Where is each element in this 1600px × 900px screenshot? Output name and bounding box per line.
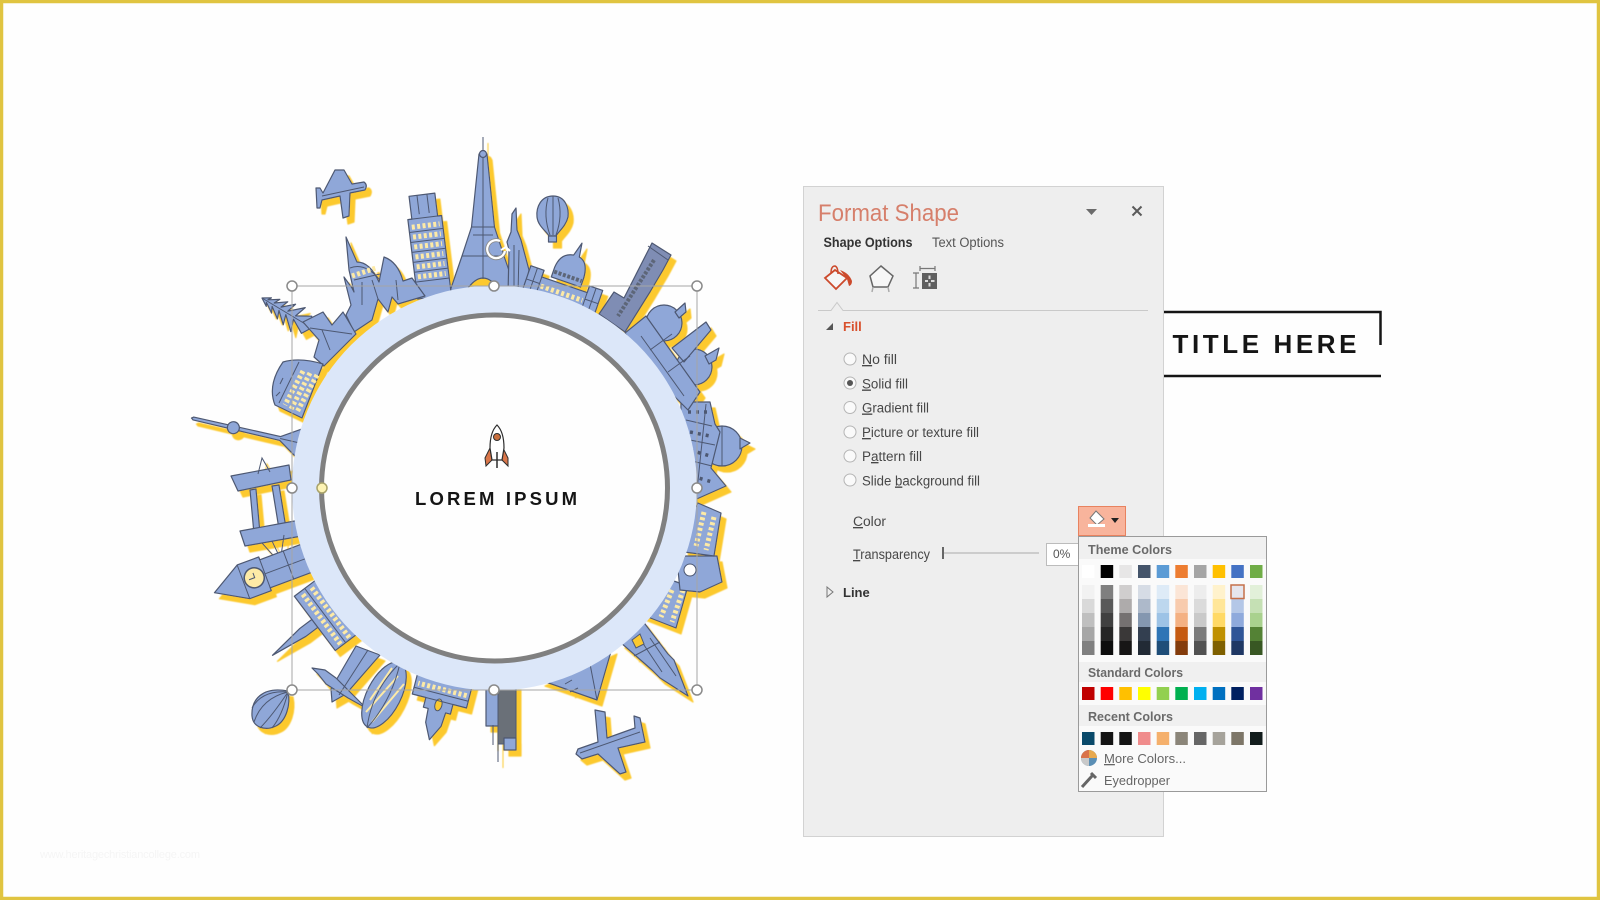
input: 0% [1046, 544, 1082, 566]
icon: fill bucket [825, 266, 852, 289]
heading: Recent Colors: Recent Colors [1088, 709, 1173, 724]
landmark: Christ statue [312, 646, 380, 708]
radio option: Pattern fill: Pattern fill [862, 449, 922, 464]
landmark: gothic spire [620, 620, 688, 696]
landmark: skyscraper [486, 684, 516, 762]
watermark: www.heritagechristiancollege.com [39, 849, 200, 861]
menu item: More Colors: More Colors... [1104, 751, 1186, 766]
landmark: twin domes [625, 303, 719, 410]
landmark: Parliament building [252, 575, 363, 682]
heading: Standard Colors: Standard Colors [1088, 665, 1183, 680]
icon: hot-air balloon top [537, 196, 568, 242]
title box: TITLE HERE [1163, 312, 1381, 376]
radio option: Slide background fill: Slide background fill [862, 474, 980, 488]
icon: airplane top [316, 170, 366, 218]
landmark: Gherkin tower [353, 655, 415, 735]
landmark: Tower Bridge [231, 458, 302, 563]
icon: rotate handle [487, 240, 510, 258]
swatches: theme shades [1082, 585, 1262, 655]
icon: rocket [485, 425, 508, 468]
radio option: Picture or texture fill: Picture or texture fill [862, 425, 979, 440]
world landmarks around the circle [188, 137, 750, 774]
radio option: Gradient fill: Gradient fill [862, 400, 929, 416]
swatches: recent [1082, 732, 1262, 745]
tab: Shape Options: Shape Options [824, 235, 912, 250]
ring: grey inner circle [322, 315, 668, 661]
heading: Theme Colors: Theme Colors [1088, 542, 1172, 557]
icon: size and properties [913, 266, 937, 289]
heading: Format Shape: Format Shape [818, 200, 959, 227]
landmark: Colosseum [272, 360, 323, 418]
heading: LOREM IPSUM: LOREM IPSUM [415, 488, 577, 509]
title box: TITLE HERE: TITLE HERE [1172, 329, 1356, 359]
slider: transparency [943, 547, 1039, 559]
radio option: No fill [844, 352, 897, 367]
landmark: St Peter's basilica [680, 402, 750, 502]
radio option: Solid fill: Solid fill [862, 376, 908, 392]
ring: pale blue disc [292, 286, 697, 690]
panel: Format Shape [804, 186, 1164, 836]
button: fill colour [1078, 506, 1126, 536]
landmark: TV tower [188, 402, 311, 460]
icon: airplane bottom [576, 710, 645, 774]
icon: colour wheel [1081, 750, 1097, 766]
icon: pane menu arrow [1086, 209, 1097, 215]
landmark: domed church [402, 667, 474, 747]
section: Line [827, 585, 870, 600]
menu item: Eyedropper: Eyedropper [1104, 773, 1171, 788]
label: Transparency: Transparency [853, 547, 930, 562]
landmark: windowed blocks [640, 503, 722, 628]
icon: hot-air balloon bottom [252, 690, 289, 728]
landmark: opera roofs [303, 312, 356, 366]
icon: pentagon [870, 266, 893, 292]
colour picker dropdown [1078, 536, 1266, 792]
tab: Text Options: Text Options [932, 235, 1004, 250]
section: Fill: Fill [843, 319, 862, 334]
landmark: Big Ben [208, 538, 321, 610]
swatches: standard [1082, 687, 1262, 700]
landmark: dark high-rise [599, 243, 671, 332]
landmark: Sacre-Coeur basilica [344, 237, 425, 332]
landmark: leaning tower of Pisa [405, 193, 451, 299]
landmark: Eiffel tower [450, 137, 516, 291]
section: Fill [826, 319, 862, 334]
input: 0%: 0% [1053, 547, 1071, 561]
selection box with handles [287, 281, 702, 695]
section: Line: Line [843, 585, 870, 600]
landmark: pagoda tower [255, 286, 319, 340]
landmark: pyramid [540, 648, 612, 700]
landmark: Capitol building [520, 230, 615, 321]
landmark: Statue of Liberty [507, 208, 529, 295]
icon: close [1132, 206, 1142, 216]
radio option: No fill: No fill [862, 352, 897, 367]
divider with notch [818, 302, 1148, 310]
icon: eyedropper [1082, 773, 1096, 787]
swatches: theme row [1082, 565, 1262, 578]
label: Color: Color [853, 514, 887, 529]
